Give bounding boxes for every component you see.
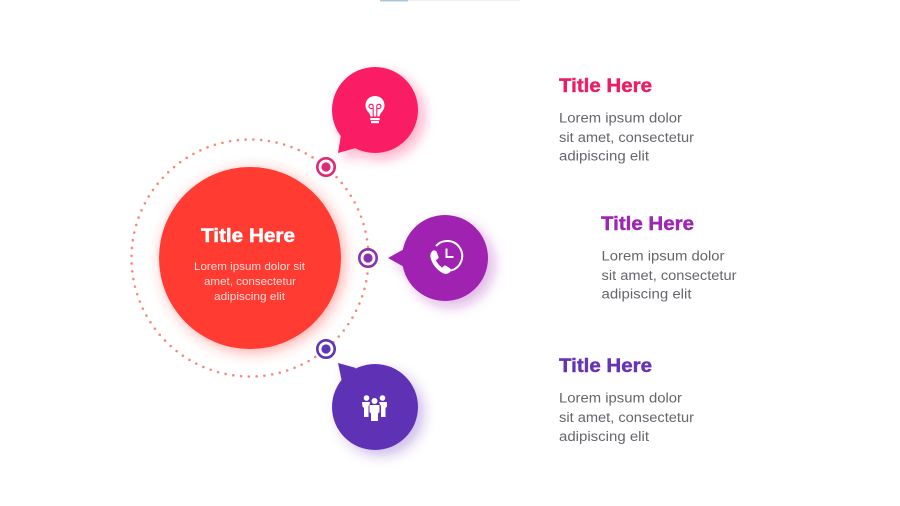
central text: amet, consectetur	[204, 276, 296, 288]
pink body: Lorem ipsum dolor	[559, 110, 683, 126]
central text: Lorem ipsum dolor sit	[194, 261, 305, 273]
dotted ring	[132, 140, 368, 376]
magenta body: Lorem ipsum dolor	[602, 248, 725, 264]
magenta body	[602, 248, 737, 302]
text block: magenta	[601, 214, 737, 302]
speech bubble: violet	[332, 363, 418, 450]
central text	[194, 261, 305, 303]
magenta body: sit amet, consectetur	[602, 268, 737, 283]
magenta body: adipiscing elit	[602, 286, 692, 302]
text block: violet	[559, 356, 695, 444]
magenta title: Title Here	[601, 214, 694, 235]
central red circle	[159, 167, 341, 349]
speech bubble: magenta	[388, 215, 488, 301]
violet title: Title Here	[559, 356, 652, 377]
pink body	[559, 110, 695, 164]
violet body	[559, 390, 695, 444]
pink title: Title Here	[559, 76, 652, 97]
icon: light bulb	[366, 96, 384, 123]
marker: pink	[317, 158, 335, 176]
top edge strip	[380, 0, 520, 1]
speech bubble: pink	[332, 67, 418, 153]
violet body: sit amet, consectetur	[559, 410, 695, 425]
text block: pink	[559, 76, 695, 164]
central text: adipiscing elit	[214, 291, 285, 303]
violet body: adipiscing elit	[559, 429, 649, 444]
central title: Title Here	[201, 226, 295, 247]
pink body: adipiscing elit	[559, 148, 649, 164]
marker: violet	[317, 340, 335, 358]
violet body: Lorem ipsum dolor	[559, 390, 683, 406]
icon: group of people	[362, 395, 387, 421]
pink body: sit amet, consectetur	[559, 130, 695, 145]
icon: phone and clock	[430, 241, 462, 274]
marker: magenta	[359, 249, 377, 267]
